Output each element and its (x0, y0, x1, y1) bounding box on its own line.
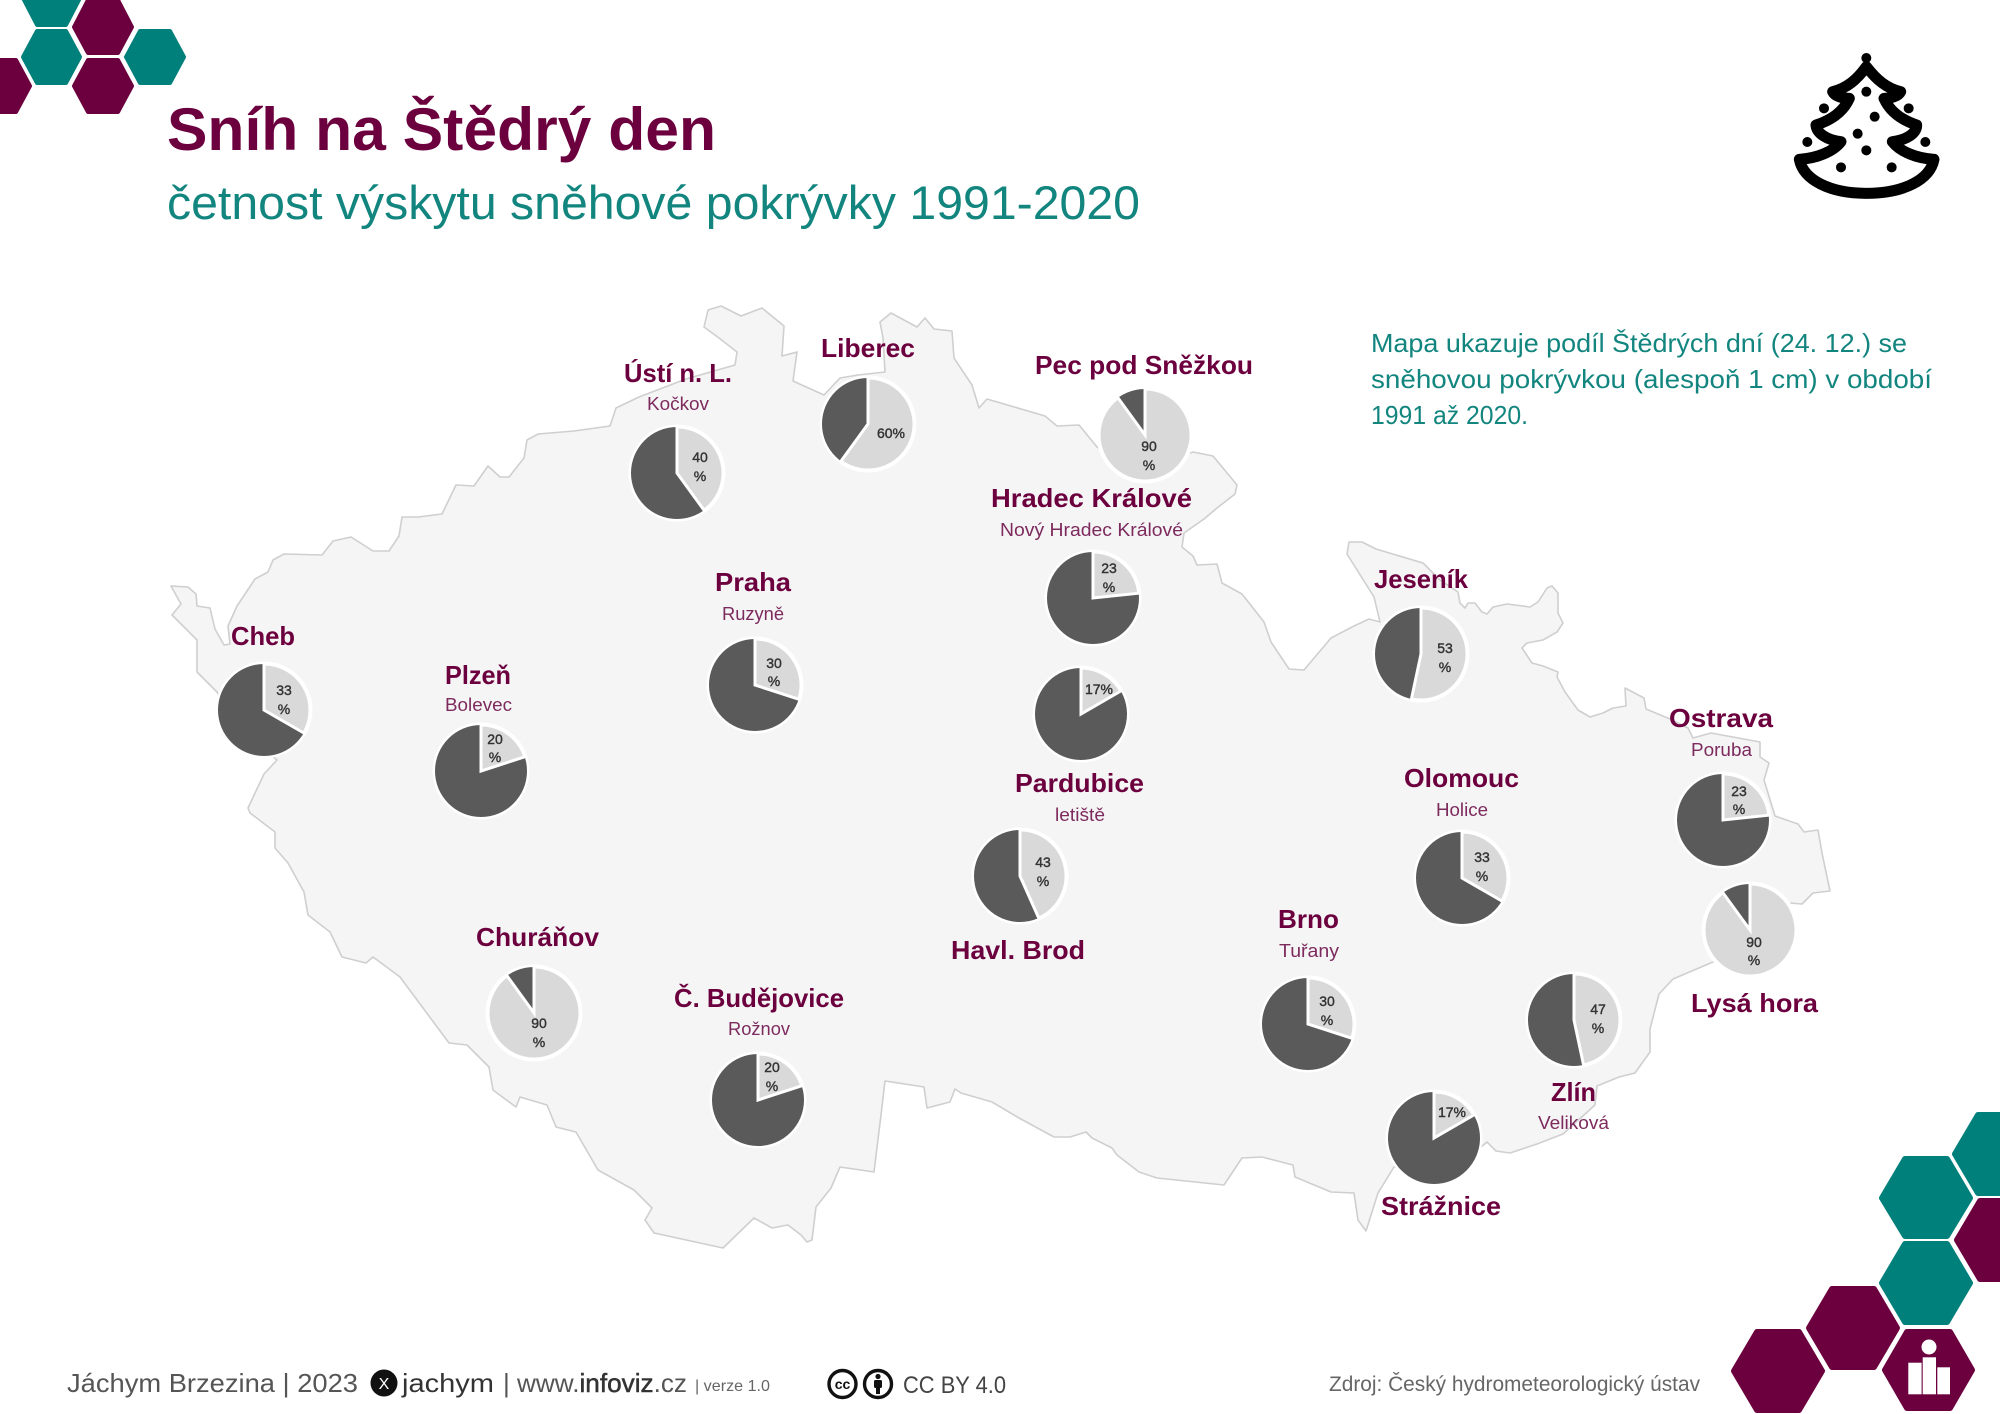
value: Praha: % (768, 673, 780, 689)
city: Praha (706, 567, 804, 734)
value: Plzeň: % (489, 749, 501, 765)
value: Olomouc: 33 (1474, 849, 1490, 865)
city: Hradec Králové (991, 483, 1192, 646)
icon: Creative Commons: cc (835, 1376, 850, 1392)
city: Ústí n. L.: Ústí n. L. (624, 358, 732, 388)
pie: Brno 30 % (1260, 976, 1356, 1072)
icon: X logo: X (379, 1376, 390, 1393)
value: Olomouc: % (1476, 868, 1488, 884)
pie: Strážnice 17 % (1386, 1090, 1482, 1186)
city: Liberec (820, 333, 916, 472)
footer: source: Zdroj: Český hydrometeorologický ústav (1329, 1373, 1700, 1396)
map: Czech Republic outline (171, 306, 1830, 1248)
station: Ruzyně: Ruzyně (722, 604, 784, 624)
pie: Liberec 60 % (820, 376, 916, 472)
value: Brno: % (1321, 1012, 1333, 1028)
pie: Pardubice 17 % (1032, 666, 1130, 762)
city: Praha: Praha (715, 567, 792, 597)
icon: Creative Commons (829, 1370, 892, 1398)
station: Kočkov: Kočkov (647, 394, 709, 414)
city: Cheb: Cheb (231, 621, 295, 651)
value: Churáňov: 90 (531, 1015, 547, 1031)
city: Ostrava (1669, 703, 1774, 868)
footer: version: | verze 1.0 (695, 1378, 770, 1395)
city: Hradec Králové: Hradec Králové (991, 483, 1192, 513)
value: Jeseník: 53 (1437, 640, 1453, 656)
icon: infoviz logo hexagon (1885, 1332, 1972, 1408)
footer: website: | www.infoviz.cz (503, 1368, 687, 1398)
city: Jeseník: Jeseník (1374, 564, 1469, 594)
city: Zlín (1526, 972, 1622, 1133)
value: Hradec: 23 (1101, 560, 1117, 576)
value: Havl. Brod: % (1037, 873, 1049, 889)
description text: Mapa ukazuje podíl Štědrých dní (24. 12.) se (1371, 328, 1907, 358)
station: Veliková: Veliková (1538, 1113, 1610, 1133)
value: Zlín: 47 (1590, 1001, 1606, 1017)
city: Churáňov (476, 922, 600, 1062)
value: Havl. Brod: 43 (1035, 854, 1051, 870)
value: Liberec: 60% (877, 425, 905, 441)
city: Plzeň (432, 660, 530, 820)
name: Strážnice: Strážnice (1381, 1191, 1501, 1221)
name: Zlín: Zlín (1551, 1077, 1596, 1107)
name: Lysá hora: Lysá hora (1691, 988, 1819, 1018)
subtitle: četnost výskytu sněhové pokrývky 1991-2020 (167, 176, 1140, 229)
city: Havl. Brod (951, 828, 1085, 965)
icon: christmas tree (1799, 53, 1934, 193)
city: Pec pod Sněžkou: Pec pod Sněžkou (1035, 350, 1253, 380)
value: Budějovice: 20 (764, 1059, 780, 1075)
value: Hradec: % (1103, 579, 1115, 595)
footer: licence: CC BY 4.0 (903, 1372, 1006, 1399)
value: Brno: 30 (1319, 993, 1335, 1009)
pie: Pec 90 % (1096, 386, 1194, 484)
city: Liberec: Liberec (821, 333, 915, 363)
value: Cheb: 33 (276, 682, 292, 698)
value: Ostrava: 23 (1731, 783, 1747, 799)
city: Churáňov: Churáňov (476, 922, 600, 952)
value: Ústí: % (694, 468, 706, 484)
station: Rožnov: Rožnov (728, 1019, 790, 1039)
pie: Ústí 40 % (628, 424, 726, 522)
city: Ostrava: Ostrava (1669, 703, 1774, 733)
footer: handle: jachym (401, 1368, 494, 1398)
pie: Havl. Brod 43 % (972, 828, 1068, 924)
value: Ústí: 40 (692, 449, 708, 465)
value: Jeseník: % (1439, 659, 1451, 675)
city: Brno: Brno (1278, 904, 1339, 934)
city: Olomouc: Olomouc (1404, 763, 1519, 793)
city: Jeseník (1372, 564, 1470, 702)
icon: X logo (370, 1370, 398, 1396)
footer: author: Jáchym Brzezina | 2023 (67, 1368, 358, 1398)
pie: Jeseník 53 % (1372, 606, 1470, 702)
value: Praha: 30 (766, 655, 782, 671)
value: Pec: 90 (1141, 438, 1157, 454)
station: Bolevec: Bolevec (445, 695, 512, 715)
city: Pec pod Sněžkou (1035, 350, 1253, 484)
value: Plzeň: 20 (487, 731, 503, 747)
description text: sněhovou pokrývkou (alespoň 1 cm) v období (1371, 364, 1933, 394)
city: Brno (1260, 904, 1356, 1072)
city: Pardubice (1015, 666, 1144, 825)
station: Nový Hradec Králové: Nový Hradec Králové (1000, 520, 1183, 540)
name: Pardubice: Pardubice (1015, 768, 1144, 798)
description text (1371, 328, 1933, 430)
value: Zlín: % (1592, 1020, 1604, 1036)
station: Poruba: Poruba (1691, 740, 1753, 760)
hexagon cluster: bottom right (1734, 1115, 2000, 1410)
value: Ostrava: % (1733, 801, 1745, 817)
city: Plzeň: Plzeň (445, 660, 511, 690)
city: Olomouc (1404, 763, 1519, 926)
value: Pec: % (1143, 457, 1155, 473)
city: Strážnice (1381, 1090, 1501, 1221)
station: Holice: Holice (1436, 800, 1488, 820)
hexagon cluster: top left (0, 0, 184, 112)
station: Tuřany: Tuřany (1279, 941, 1339, 961)
pie: Plzeň 20 % (432, 722, 530, 820)
pie: Lysá hora 90 % (1702, 882, 1798, 978)
value: Budějovice: % (766, 1078, 778, 1094)
pie: Olomouc 33 % (1414, 830, 1510, 926)
name: Havl. Brod: Havl. Brod (951, 935, 1085, 965)
pie: Praha 30 % (706, 636, 804, 734)
pie: Hradec 23 % (1044, 550, 1142, 646)
value: Pardubice: 17% (1085, 681, 1113, 697)
pie: Churáňov 90 % (486, 964, 582, 1062)
pie: Ostrava 23 % (1674, 772, 1772, 868)
city: Ústí n. L. (624, 358, 732, 522)
station: letiště: letiště (1055, 805, 1105, 825)
value: Cheb: % (278, 701, 290, 717)
value: Churáňov: % (533, 1034, 545, 1050)
city: Č. Budějovice: Č. Budějovice (674, 983, 844, 1013)
city: Č. Budějovice (674, 983, 844, 1148)
pie: Cheb 33 % (216, 662, 312, 758)
city: Lysá hora (1691, 882, 1819, 1018)
pie: Budějovice 20 % (710, 1052, 806, 1148)
value: Strážnice: 17% (1438, 1104, 1466, 1120)
description text: 1991 až 2020. (1371, 400, 1528, 430)
title: Sníh na Štědrý den (167, 96, 716, 163)
pie: Zlín 47 % (1526, 972, 1622, 1068)
value: Lysá hora: 90 (1746, 934, 1762, 950)
city: Cheb (216, 621, 312, 758)
value: Lysá hora: % (1748, 952, 1760, 968)
